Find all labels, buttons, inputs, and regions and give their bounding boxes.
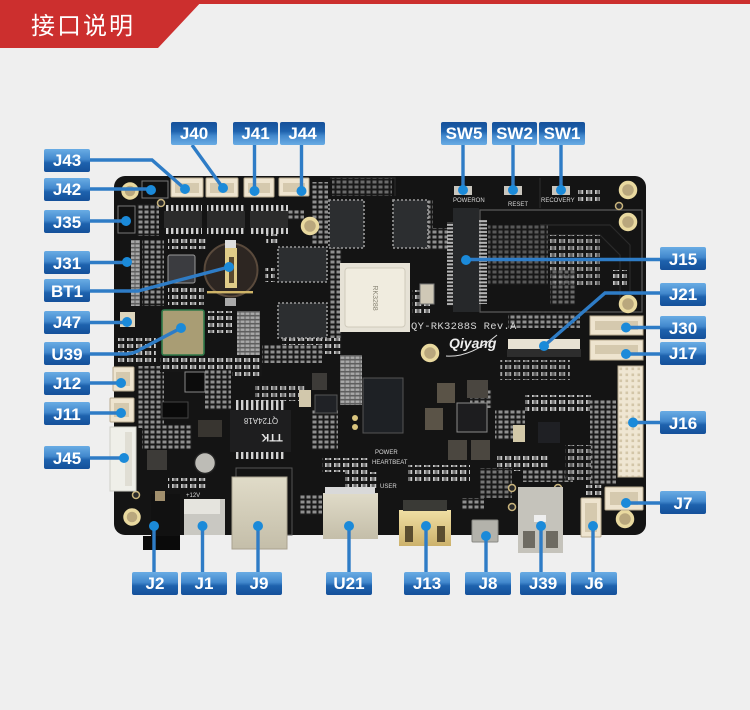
small component clusters <box>118 178 627 515</box>
label J45 <box>44 446 90 469</box>
J15 socket <box>447 208 487 312</box>
label BT1: BT1 <box>51 282 83 301</box>
title: 接口说明 <box>31 13 135 40</box>
silkscreen labels: USER <box>380 484 397 490</box>
label J47 <box>44 311 90 334</box>
label J40: J40 <box>180 124 208 143</box>
silkscreen labels: POWERON <box>453 198 485 204</box>
label J2: J2 <box>146 574 164 593</box>
J8 micro USB <box>472 520 498 542</box>
silkscreen labels: RECOVERY <box>541 198 575 204</box>
driver chips <box>164 205 288 234</box>
label J17: J17 <box>669 344 697 363</box>
label SW5: SW5 <box>446 124 482 143</box>
transformer TTK: TTK <box>261 431 283 443</box>
transformer TTK: QT24A18 <box>243 416 278 425</box>
label J1: J1 <box>195 574 213 593</box>
label J16: J16 <box>669 414 697 433</box>
label J43 <box>44 149 90 172</box>
J39 USB <box>518 487 563 553</box>
circuit board <box>110 176 646 553</box>
silkscreen labels <box>186 198 575 499</box>
label SW2: SW2 <box>496 124 533 143</box>
J9 RJ45 <box>232 468 292 549</box>
label J35: J35 <box>53 213 81 232</box>
label J2 <box>132 572 178 595</box>
label J13 <box>404 572 450 595</box>
label J8: J8 <box>479 574 497 593</box>
electrolytic capacitor <box>194 452 216 474</box>
label U39 <box>44 342 90 365</box>
top connectors <box>171 178 309 197</box>
label J15: J15 <box>669 250 697 269</box>
switches <box>454 186 570 195</box>
silkscreen labels: +12V <box>186 493 200 499</box>
label J43: J43 <box>53 151 81 170</box>
J1 connector <box>184 499 225 535</box>
J31 header <box>131 240 164 306</box>
J35 header <box>118 206 135 233</box>
label J9: J9 <box>250 574 268 593</box>
silkscreen labels: RESET <box>508 202 528 208</box>
J6 J7 connectors <box>581 487 643 537</box>
gold test pads <box>352 415 358 430</box>
label J12 <box>44 372 90 395</box>
J30 J17 headers <box>590 316 643 360</box>
label J42: J42 <box>53 180 81 199</box>
J2 power jack <box>143 491 180 550</box>
J42 header <box>142 181 168 198</box>
label J6: J6 <box>585 574 603 593</box>
memory chips <box>278 200 428 338</box>
J16 header <box>618 366 643 477</box>
label J11: J11 <box>53 405 81 424</box>
label J30: J30 <box>669 319 697 338</box>
board silkscreen name: QY-RK3288S Rev.A <box>411 321 517 333</box>
J13 HDMI <box>399 500 451 546</box>
label J12: J12 <box>53 374 81 393</box>
label J16 <box>660 411 706 434</box>
label J7: J7 <box>674 494 692 513</box>
label J21: J21 <box>669 285 697 304</box>
label J8 <box>465 572 511 595</box>
label J40 <box>171 122 217 145</box>
label J13: J13 <box>413 574 441 593</box>
label J41 <box>233 122 278 145</box>
label J47: J47 <box>53 313 81 332</box>
label J9 <box>236 572 282 595</box>
transformer TTK <box>230 400 291 459</box>
label SW1 <box>539 122 585 145</box>
processor: RK3288 <box>371 285 378 311</box>
label J31 <box>44 251 90 274</box>
mounting holes <box>123 182 636 526</box>
small plated vias <box>132 200 622 510</box>
Qiyang logo: Qiyang <box>449 335 497 351</box>
J47 socket <box>120 312 135 327</box>
label J42 <box>44 178 90 201</box>
label J44: J44 <box>288 124 317 143</box>
U21 card slot <box>323 487 378 539</box>
title banner <box>0 0 750 48</box>
label J21 <box>660 283 706 306</box>
label SW5 <box>441 122 487 145</box>
label J17 <box>660 342 706 365</box>
label J39: J39 <box>529 574 557 593</box>
label J41: J41 <box>241 124 270 143</box>
label J15 <box>660 247 706 270</box>
U39 wireless module <box>162 310 204 355</box>
battery holder BT1 <box>204 240 258 306</box>
J21 FPC connector <box>507 339 581 357</box>
J12 J11 J45 side connectors <box>110 367 136 491</box>
label J1 <box>181 572 227 595</box>
label U21 <box>326 572 372 595</box>
label J11 <box>44 402 90 425</box>
label SW2 <box>492 122 537 145</box>
label U39: U39 <box>51 345 83 364</box>
silkscreen labels: POWER <box>375 450 398 456</box>
label J35 <box>44 210 90 233</box>
silkscreen labels: HEARTBEAT <box>372 460 408 466</box>
label J39 <box>520 572 566 595</box>
label J31: J31 <box>53 254 81 273</box>
processor <box>340 263 410 332</box>
label J6 <box>571 572 617 595</box>
dark ICs and inductors <box>147 284 560 470</box>
buzzer <box>168 255 195 283</box>
label SW1: SW1 <box>544 124 580 143</box>
label J7 <box>660 491 706 514</box>
label BT1 <box>44 279 90 302</box>
label U21: U21 <box>333 574 365 593</box>
trace shading <box>330 178 642 312</box>
label J44 <box>280 122 325 145</box>
label J45: J45 <box>53 449 81 468</box>
callout lines and dots <box>90 145 660 572</box>
label J30 <box>660 316 706 339</box>
